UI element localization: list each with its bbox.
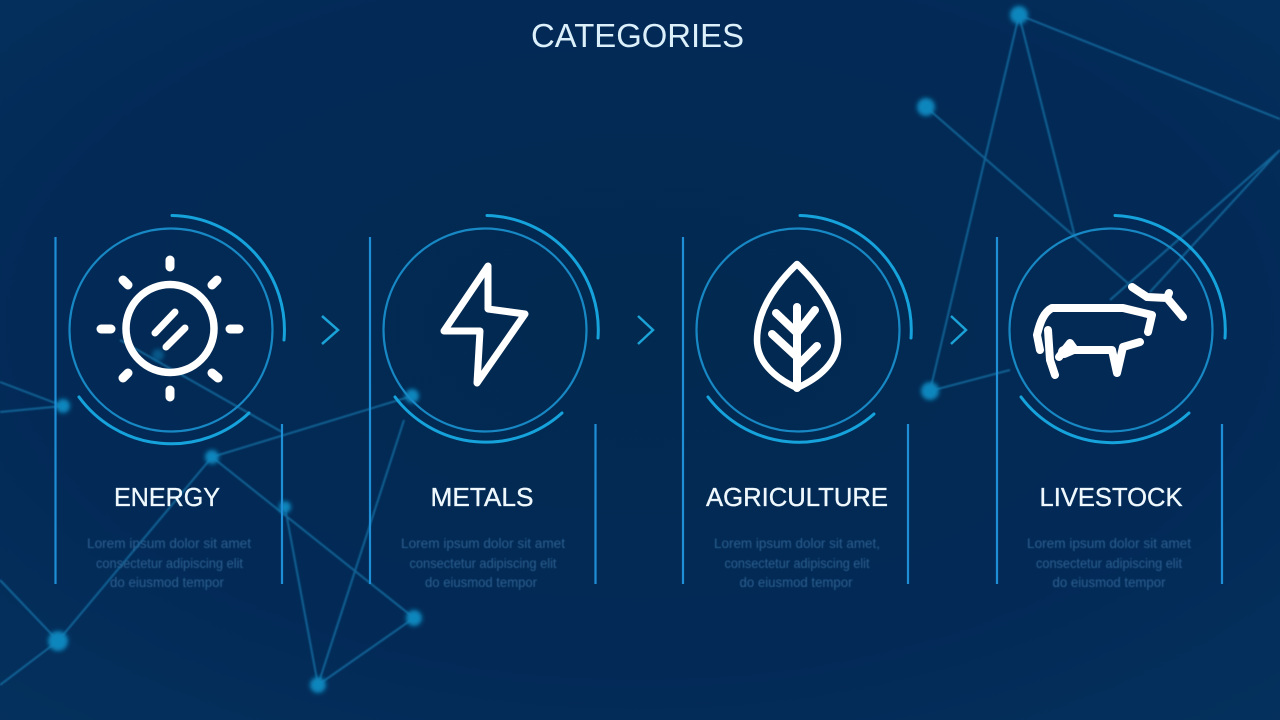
arrow — [951, 316, 966, 344]
heading: LIVESTOCK — [1040, 482, 1183, 512]
description: do eiusmod tempor — [425, 574, 537, 590]
icon ring — [696, 216, 911, 442]
arrow — [322, 316, 338, 344]
description: consectetur adipiscing elit — [96, 555, 243, 571]
panel frame lines — [370, 237, 596, 584]
arrow — [638, 316, 653, 344]
title: CATEGORIES — [531, 17, 744, 54]
description — [1027, 535, 1191, 590]
icon: sun — [101, 260, 239, 397]
description: Lorem ipsum dolor sit amet — [87, 535, 251, 551]
heading: METALS — [430, 482, 534, 512]
panel: livestock — [997, 216, 1225, 590]
description: do eiusmod tempor — [1052, 574, 1166, 590]
icon ring — [1010, 216, 1225, 443]
panel frame lines — [683, 237, 908, 584]
description: consectetur adipiscing elit — [410, 555, 557, 571]
description: Lorem ipsum dolor sit amet — [401, 535, 565, 551]
icon: cow — [1037, 287, 1183, 375]
panel frame lines — [997, 237, 1222, 584]
description: consectetur adipiscing elit — [724, 555, 870, 571]
description: Lorem ipsum dolor sit amet, — [714, 535, 880, 551]
panel: energy — [56, 216, 284, 590]
icon: leaf — [757, 264, 838, 388]
description — [87, 535, 251, 590]
panel: metals — [370, 216, 598, 590]
icon: lightning bolt — [444, 266, 525, 383]
description: do eiusmod tempor — [110, 574, 224, 590]
icon ring — [384, 216, 598, 442]
description — [714, 535, 880, 590]
icon ring — [70, 216, 284, 444]
network: top right — [917, 6, 1280, 400]
network: bottom left — [0, 340, 422, 693]
panel frame lines — [56, 237, 282, 584]
description: do eiusmod tempor — [740, 574, 853, 590]
description: Lorem ipsum dolor sit amet — [1027, 535, 1191, 551]
heading: AGRICULTURE — [706, 482, 888, 512]
description — [401, 535, 565, 590]
heading: ENERGY — [114, 482, 220, 512]
panel: agriculture — [683, 216, 911, 590]
description: consectetur adipiscing elit — [1036, 555, 1182, 571]
